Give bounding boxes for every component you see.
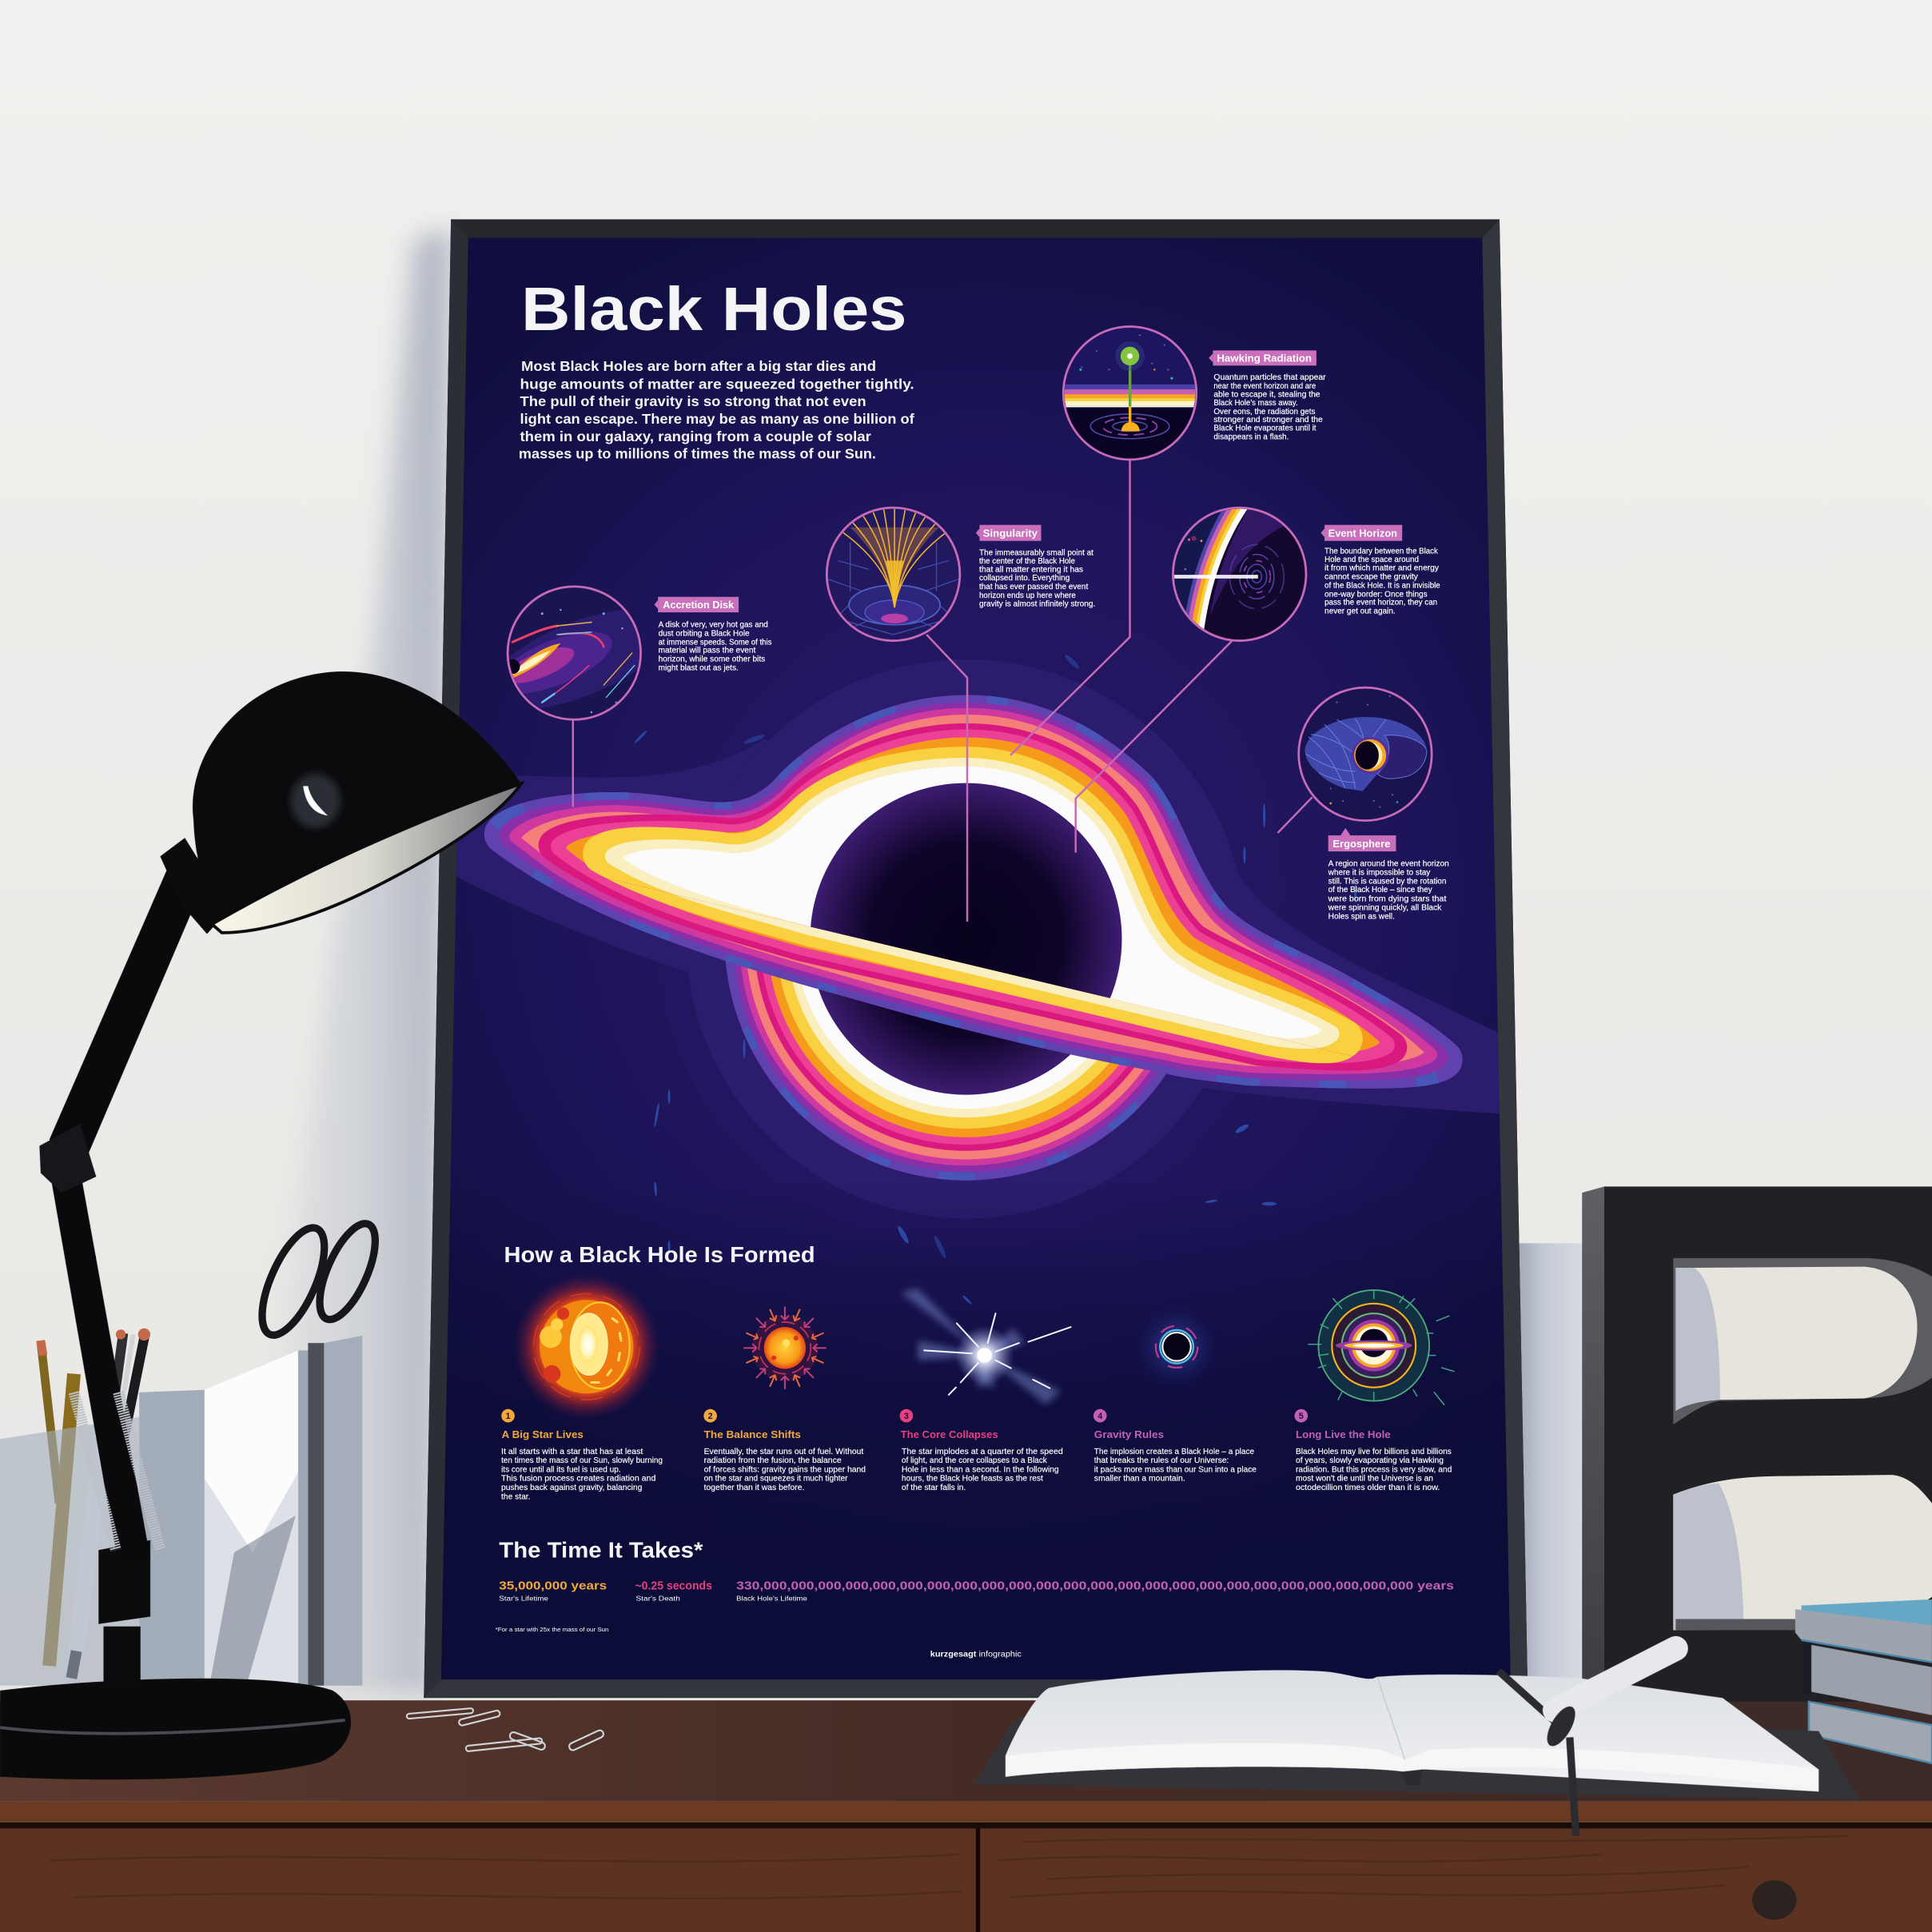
text: Accretion Disk description: horizon, while some other bits: [659, 655, 765, 663]
elbow joint: [39, 1124, 96, 1193]
icon: long lived black hole: [1309, 1290, 1454, 1404]
timeline: star death: ~0.25 seconds: [635, 1579, 712, 1592]
text: Ergosphere description: were spinning quickly, all Black: [1328, 903, 1441, 912]
timeline: star lifetime: 35,000,000 years: [499, 1579, 607, 1592]
timeline: star lifetime: [499, 1579, 607, 1602]
text: Ergosphere description: [1328, 859, 1449, 921]
scissors: [249, 1217, 387, 1344]
text: Singularity description: [979, 548, 1095, 609]
background dust streaks: [634, 653, 1356, 1305]
step 4: [1093, 1409, 1257, 1484]
head connector: [160, 838, 229, 934]
tag: Singularity: [976, 525, 1042, 541]
step 2: [703, 1409, 866, 1492]
step 4: smaller than a mountain.: [1094, 1475, 1185, 1484]
text: Hawking Radiation description: near the event horizon and are: [1213, 382, 1317, 391]
panel: event horizon: [1170, 503, 1440, 641]
icon: core collapse: [901, 1289, 1071, 1404]
text: Singularity description: gravity is almost infinitely strong.: [979, 600, 1095, 609]
pencils: [41, 1328, 150, 1678]
step 2: radiation from the fusion, the balance: [704, 1456, 842, 1465]
lower arm: [52, 1177, 150, 1565]
text: Ergosphere description: were born from dying stars that: [1328, 894, 1447, 903]
icon: ergosphere circle: [1299, 687, 1432, 821]
step 5: octodecillion times older than it is now.: [1296, 1484, 1440, 1492]
step 5: [1294, 1409, 1452, 1492]
text: Singularity description: horizon ends up here where: [979, 592, 1076, 600]
step 2: Eventually, the star runs out of fuel. Without: [704, 1448, 863, 1456]
text: Accretion Disk description: [659, 620, 771, 672]
lamp base: [0, 1679, 351, 1779]
step 5: most won't die until the Universe is an: [1296, 1475, 1433, 1484]
text: Event Horizon description: [1325, 547, 1440, 615]
step 1: 1: [506, 1412, 511, 1421]
tag: Singularity: Singularity: [983, 527, 1038, 539]
step 3: of the star falls in.: [902, 1484, 966, 1492]
tag: Accretion Disk: [655, 597, 739, 612]
intro text: [519, 358, 914, 461]
step 4: that breaks the rules of our Universe:: [1094, 1456, 1229, 1465]
text: Singularity description: the center of the Black Hole: [979, 557, 1075, 566]
step 5: 5: [1299, 1412, 1304, 1421]
tag: Hawking Radiation: Hawking Radiation: [1217, 353, 1312, 364]
timeline: black hole lifetime: 330,000,000,000,000,000,000,000,000,000,000,000,000,000,000,000,000,000,000,000,000,000,000,000,000 years: [736, 1579, 1454, 1592]
step 1: It all starts with a star that has at least: [501, 1448, 643, 1456]
icon: accretion disk circle: [474, 587, 684, 731]
text: Ergosphere description: Holes spin as well.: [1328, 912, 1395, 921]
timeline: star lifetime: Star's Lifetime: [499, 1594, 548, 1602]
text: Accretion Disk description: dust orbiting a Black Hole: [659, 629, 750, 638]
step 2: of forces shifts: gravity gains the upper hand: [704, 1465, 866, 1474]
tag: Event Horizon: [1321, 525, 1402, 541]
timeline: black hole lifetime: Black Hole's Lifetime: [736, 1594, 807, 1602]
icon: young black hole: [1133, 1302, 1221, 1391]
text: Singularity description: The immeasurably small point at: [979, 548, 1093, 557]
text: Accretion Disk description: material will pass the event: [659, 646, 756, 655]
tag: Ergosphere: [1328, 828, 1396, 851]
timeline: star death: [635, 1579, 712, 1602]
panel: ergosphere: [1299, 687, 1449, 921]
text: Hawking Radiation description: Quantum particles that appear: [1213, 373, 1326, 382]
desk: [0, 1700, 1932, 1932]
panel: singularity: [827, 505, 1095, 641]
pencil holder: [0, 1217, 387, 1686]
icon: star under gravity with inward arrows: [744, 1307, 826, 1388]
springs: [74, 1392, 160, 1550]
background fade lower poster: [441, 1245, 1511, 1667]
poster frame: [424, 219, 1528, 1698]
credit: kurzgesagt infographic: [930, 1650, 1022, 1659]
text: Accretion Disk description: at immense speeds. Some of this: [659, 638, 771, 647]
text: Event Horizon description: one-way border: Once things: [1325, 590, 1428, 599]
text: Singularity description: that all matter entering it has: [979, 566, 1083, 575]
heading: How a Black Hole Is Formed: How a Black Hole Is Formed: [504, 1242, 815, 1267]
text: Hawking Radiation description: Over eons, the radiation gets: [1213, 408, 1316, 416]
panel: accretion disk: [474, 587, 771, 731]
poster background: [447, 238, 1504, 1437]
step 1: the star.: [501, 1492, 530, 1501]
step 4: 4: [1097, 1412, 1102, 1421]
intro text: masses up to millions of times the mass of our Sun.: [519, 445, 876, 461]
step 5: Long Live the Hole: [1296, 1428, 1391, 1440]
notebook: [974, 1648, 1861, 1836]
text: Event Horizon description: cannot escape the gravity: [1325, 572, 1418, 581]
text: Singularity description: that has ever passed the event: [979, 583, 1089, 592]
text: Ergosphere description: of the Black Hole – since they: [1328, 886, 1432, 894]
step 3: hours, the Black Hole feasts as the rest: [902, 1475, 1043, 1484]
panel: hawking radiation: [1060, 326, 1326, 463]
step 3: The Core Collapses: [901, 1428, 998, 1440]
text: Event Horizon description: it from which matter and energy: [1325, 564, 1439, 572]
text: Accretion Disk description: might blast out as jets.: [659, 663, 739, 672]
step 1: A Big Star Lives: [502, 1428, 584, 1440]
step 2: 2: [708, 1412, 713, 1421]
text: Hawking Radiation description: able to escape it, stealing the: [1213, 391, 1321, 400]
lamp post and bracket: [98, 1540, 150, 1688]
tag: Accretion Disk: Accretion Disk: [663, 599, 735, 611]
text: Event Horizon description: The boundary between the Black: [1325, 547, 1438, 556]
text: Event Horizon description: never get out again.: [1325, 607, 1396, 615]
step 1: [501, 1409, 663, 1501]
ribbon bookmark: [1498, 1671, 1576, 1836]
timeline: black hole lifetime: [736, 1579, 1454, 1602]
timeline: star death: Star's Death: [635, 1594, 680, 1602]
callout lines: [573, 458, 1313, 922]
poster artwork: [419, 238, 1528, 1688]
text: Hawking Radiation description: Black Hole evaporates until it: [1213, 424, 1317, 433]
text: Singularity description: collapsed into. Everything: [979, 574, 1070, 583]
text: Ergosphere description: where it is impossible to stay: [1328, 868, 1430, 877]
step 3: of light, and the core collapses to a Black: [902, 1456, 1048, 1465]
outer halo: [456, 659, 1500, 1218]
intro text: huge amounts of matter are squeezed together tightly.: [520, 376, 914, 392]
books: [1795, 1599, 1932, 1763]
text: Event Horizon description: pass the event horizon, they can: [1325, 598, 1437, 607]
step 2: together than it was before.: [704, 1484, 804, 1492]
icon: big star: [512, 1273, 660, 1420]
intro text: The pull of their gravity is so strong that not even: [520, 393, 866, 409]
step 3: [900, 1409, 1063, 1492]
icon: singularity circle: [827, 505, 960, 641]
icon: hawking radiation circle: [1060, 326, 1201, 463]
accretion disk bands: [504, 715, 1443, 1069]
step 3: Hole in less than a second. In the following: [902, 1465, 1059, 1474]
desk lamp: [0, 671, 521, 1779]
intro text: Most Black Holes are born after a big star dies and: [521, 358, 876, 374]
text: Event Horizon description: of the Black Hole. It is an invisible: [1325, 581, 1440, 590]
text: Hawking Radiation description: [1213, 373, 1326, 441]
lamp shade: [193, 671, 521, 924]
step 5: radiation. But this process is very slow, and: [1296, 1465, 1452, 1474]
text: Event Horizon description: Hole and the space around: [1325, 556, 1419, 564]
footnote: *For a star with 25x the mass of our Sun: [496, 1626, 608, 1633]
step 5: of years, slowly evaporating via Hawking: [1296, 1456, 1444, 1465]
text: Hawking Radiation description: stronger and stronger and the: [1213, 416, 1323, 424]
wall shadow right of poster: [1504, 1243, 1583, 1707]
step 3: The star implodes at a quarter of the speed: [902, 1448, 1063, 1456]
text: Hawking Radiation description: Black Hole’s mass away.: [1213, 399, 1298, 408]
paper clips: [407, 1708, 604, 1751]
step 4: it packs more mass than our Sun into a place: [1094, 1465, 1257, 1474]
black hole: [811, 783, 1121, 1095]
step 4: Gravity Rules: [1094, 1428, 1164, 1440]
step 1: pushes back against gravity, balancing: [501, 1484, 642, 1492]
step 3: 3: [904, 1412, 909, 1421]
heading: The Time It Takes: The Time It Takes*: [499, 1537, 703, 1562]
step 2: on the star and squeezes it much tighter: [704, 1475, 848, 1484]
step 1: This fusion process creates radiation and: [501, 1475, 655, 1484]
step 1: its core until all its fuel is used up.: [501, 1465, 621, 1474]
title: Black Holes: [521, 275, 907, 344]
step 5: Black Holes may live for billions and billions: [1296, 1448, 1452, 1456]
intro text: them in our galaxy, ranging from a couple of solar: [520, 428, 871, 444]
intro text: light can escape. There may be as many as one billion of: [520, 411, 914, 427]
icon: event horizon circle: [1170, 503, 1318, 641]
lamp shade underside: [212, 783, 521, 933]
text: Ergosphere description: still. This is caused by the rotation: [1328, 877, 1446, 886]
tag: Hawking Radiation: [1209, 350, 1317, 365]
letter B decoration: [1582, 1186, 1932, 1702]
text: Ergosphere description: A region around the event horizon: [1328, 859, 1449, 868]
step 1: ten times the mass of our Sun, slowly burning: [501, 1456, 663, 1465]
text: Accretion Disk description: A disk of very, very hot gas and: [659, 620, 768, 629]
step 4: The implosion creates a Black Hole – a place: [1094, 1448, 1254, 1456]
front of accretion disk over the hole: [504, 715, 1443, 1069]
lamp shade reflection: [291, 774, 340, 828]
rolled page: [1549, 1648, 1682, 1711]
disk rear ring around the hole: [726, 961, 1166, 1181]
wall shadow left of poster: [241, 228, 451, 1694]
pen clip: [1541, 1702, 1581, 1751]
tag: Ergosphere: Ergosphere: [1332, 838, 1390, 850]
tag: Event Horizon: Event Horizon: [1328, 527, 1397, 539]
upper arm: [50, 862, 203, 1165]
text: Hawking Radiation description: disappears in a flash.: [1213, 432, 1289, 441]
step 2: The Balance Shifts: [704, 1428, 801, 1440]
